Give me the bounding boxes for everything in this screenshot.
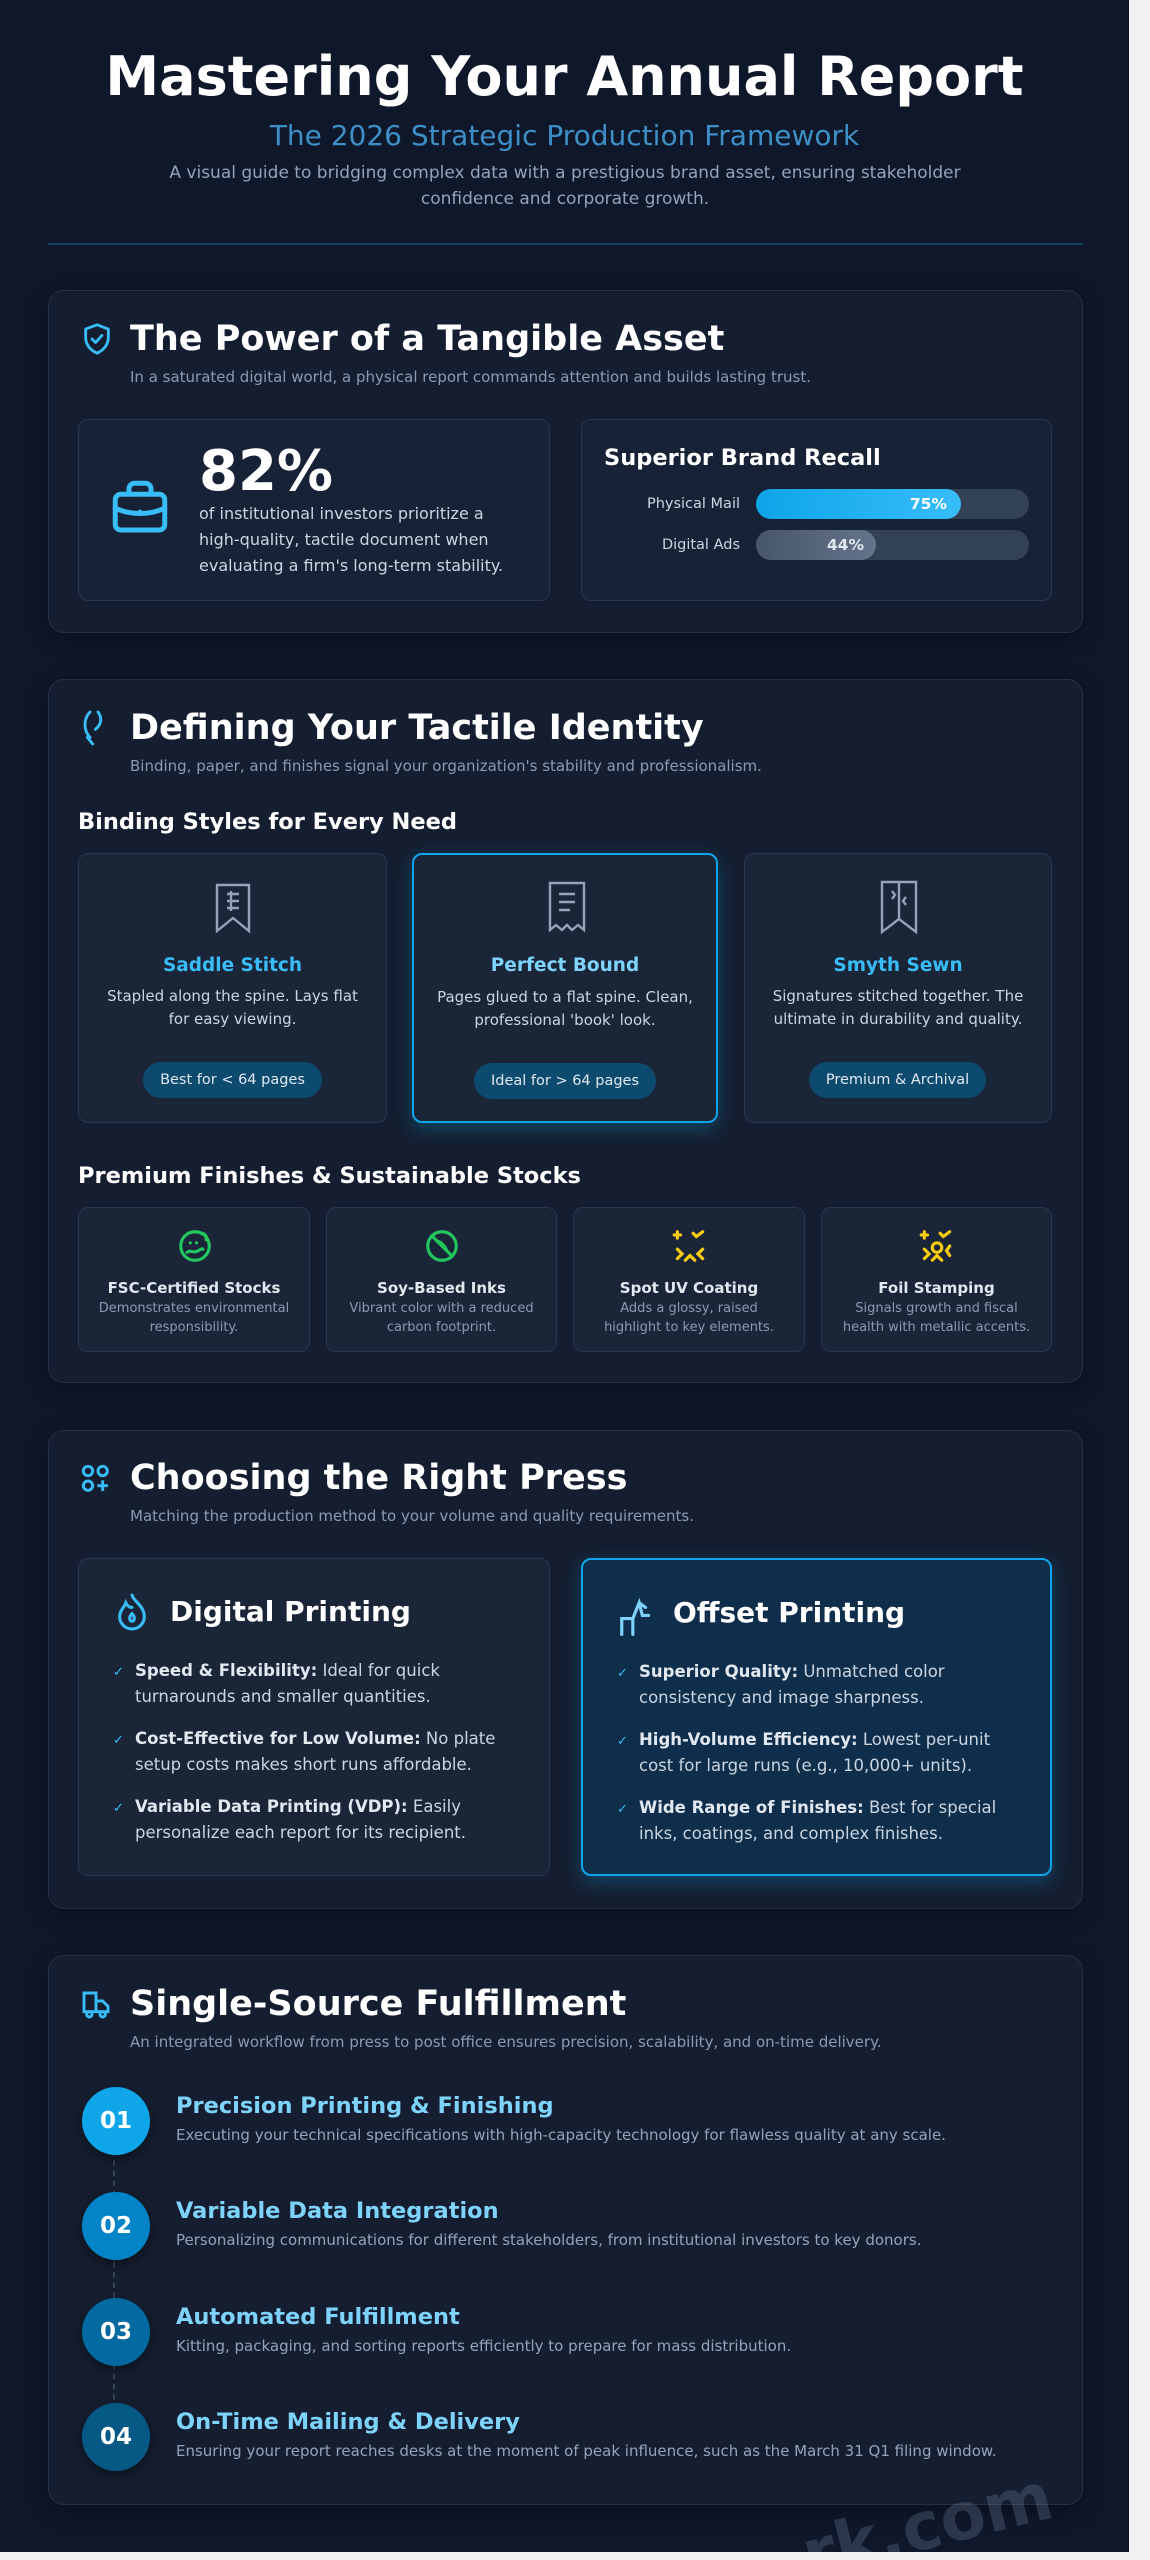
panel: fulfillment <box>48 1955 1083 2505</box>
title: Spot UV Coating <box>620 1279 758 1297</box>
title: Perfect Bound <box>491 955 639 976</box>
panel: tangible asset <box>48 290 1083 633</box>
step 02: Personalizing communications for different stakeholders, from institutional investors to key donors. <box>176 2231 921 2249</box>
intro text: A visual guide to bridging complex data with a prestigious brand asset, ensuring stakeholder confidence and corporate growth. <box>169 163 961 209</box>
card: spot UV <box>573 1207 805 1352</box>
icon: sparkles <box>672 1230 704 1262</box>
bar: physical mail <box>647 489 1029 519</box>
step 03 <box>80 2298 791 2374</box>
pill: saddle stitch <box>143 1062 322 1098</box>
card: offset printing: ✓ <box>617 1734 628 1749</box>
description: Signals growth and fiscal health with metallic accents. <box>843 1301 1030 1335</box>
icon: document <box>548 882 586 932</box>
description: Demonstrates environmental responsibility. <box>99 1301 289 1335</box>
list item: Wide Range of Finishes: Best for special inks, coatings, and complex finishes. <box>639 1798 996 1843</box>
stat card 82% <box>78 419 550 601</box>
heading: tangible asset: The Power of a Tangible Asset <box>130 319 724 359</box>
pill: smyth sewn: Premium & Archival <box>826 1072 969 1088</box>
icon: flame drop <box>118 1594 146 1630</box>
card: digital printing: ✓ <box>113 1801 124 1816</box>
pill: saddle stitch: Best for < 64 pages <box>160 1072 305 1088</box>
card title: Digital Printing <box>170 1595 411 1628</box>
subheading: tangible asset: In a saturated digital world, a physical report commands attention and builds lasting trust. <box>130 368 811 386</box>
step 02: Variable Data Integration <box>176 2198 499 2224</box>
card: digital printing <box>78 1558 550 1876</box>
subheading: fulfillment: An integrated workflow from press to post office ensures precision, scalability, and on-time delivery. <box>130 2033 882 2051</box>
heading: choosing press: Choosing the Right Press <box>130 1458 627 1498</box>
stat number: 82% <box>199 439 333 504</box>
stat text: of institutional investors prioritize a high-quality, tactile document when evaluating a firm's long-term stability. <box>199 504 503 575</box>
card: FSC <box>78 1207 310 1352</box>
bar: digital ads <box>662 530 1029 560</box>
list item: High-Volume Efficiency: Lowest per-unit cost for large runs (e.g., 10,000+ units). <box>639 1730 990 1775</box>
icon: sparkle circle <box>920 1230 952 1262</box>
step 04: On-Time Mailing & Delivery <box>176 2409 520 2435</box>
icon: bookmark list <box>216 884 250 934</box>
subheading: choosing press: Matching the production method to your volume and quality requirements. <box>130 1507 694 1525</box>
heading: premium finishes: Premium Finishes & Sustainable Stocks <box>78 1163 581 1189</box>
step 04: Ensuring your report reaches desks at the moment of peak influence, such as the March 31 Q1 filing window. <box>176 2442 997 2460</box>
heading: fulfillment: Single-Source Fulfillment <box>130 1984 626 2024</box>
card: digital printing: ✓ <box>113 1665 124 1680</box>
card title: Offset Printing <box>673 1596 905 1629</box>
panel: choosing press <box>48 1430 1083 1909</box>
title: Foil Stamping <box>878 1279 995 1297</box>
card: foil stamping <box>821 1207 1052 1352</box>
bar chart: brand recall <box>581 419 1052 601</box>
icon: leaf face <box>179 1230 211 1262</box>
card: offset printing <box>581 1558 1052 1876</box>
description: Signatures stitched together. The ultimate in durability and quality. <box>773 987 1023 1028</box>
card: saddle stitch <box>78 853 387 1123</box>
pill: smyth sewn <box>809 1062 986 1098</box>
title: Mastering Your Annual Report <box>105 45 1024 108</box>
icon: press <box>620 1598 650 1636</box>
title: Smyth Sewn <box>833 955 963 976</box>
card: offset printing: ✓ <box>617 1802 628 1817</box>
icon: book sewn <box>880 880 918 934</box>
bar: physical mail: 75% <box>910 495 947 513</box>
icon: shield check <box>84 323 110 355</box>
bar: digital ads: Digital Ads <box>662 537 740 553</box>
bar: physical mail: Physical Mail <box>647 496 740 512</box>
pill: perfect bound: Ideal for > 64 pages <box>491 1073 639 1089</box>
icon: grid plus <box>82 1464 109 1492</box>
card: smyth sewn <box>744 853 1052 1123</box>
step 02 <box>80 2192 921 2268</box>
bar: digital ads: 44% <box>827 536 864 554</box>
list item: Superior Quality: Unmatched color consistency and image sharpness. <box>639 1662 945 1707</box>
step 01: Precision Printing & Finishing <box>176 2093 554 2119</box>
list item: Variable Data Printing (VDP): Easily personalize each report for its recipient. <box>135 1797 466 1842</box>
step 03: 03 <box>100 2319 132 2345</box>
step 04 <box>80 2403 997 2476</box>
card: digital printing: ✓ <box>113 1733 124 1748</box>
icon: briefcase <box>112 480 168 532</box>
step 04: 04 <box>100 2424 132 2450</box>
description: Stapled along the spine. Lays flat for easy viewing. <box>107 987 358 1028</box>
title: Soy-Based Inks <box>377 1279 506 1297</box>
icon: truck <box>82 1992 110 2018</box>
pill: perfect bound <box>474 1063 656 1099</box>
description: Pages glued to a flat spine. Clean, professional 'book' look. <box>437 988 693 1029</box>
step 03: Kitting, packaging, and sorting reports efficiently to prepare for mass distribution. <box>176 2337 791 2355</box>
heading: tactile identity: Defining Your Tactile Identity <box>130 708 704 748</box>
heading: binding styles: Binding Styles for Every Need <box>78 809 457 835</box>
step 01: 01 <box>100 2108 132 2134</box>
icon: no-drop <box>426 1230 458 1262</box>
subheading: tactile identity: Binding, paper, and finishes signal your organization's stability and professionalism. <box>130 757 762 775</box>
description: Adds a glossy, raised highlight to key elements. <box>604 1301 774 1335</box>
step 02: 02 <box>100 2213 132 2239</box>
chart title: Superior Brand Recall <box>604 445 881 471</box>
step 03: Automated Fulfillment <box>176 2304 460 2330</box>
card: perfect bound <box>412 853 718 1123</box>
title: FSC-Certified Stocks <box>108 1279 280 1297</box>
subtitle: The 2026 Strategic Production Framework <box>270 119 859 152</box>
panel: tactile identity <box>48 679 1083 1383</box>
list item: Speed & Flexibility: Ideal for quick turnarounds and smaller quantities. <box>135 1661 440 1706</box>
step 01 <box>80 2087 946 2163</box>
icon: feather <box>84 710 102 746</box>
list item: Cost-Effective for Low Volume: No plate setup costs makes short runs affordable. <box>135 1729 495 1774</box>
description: Vibrant color with a reduced carbon footprint. <box>349 1301 534 1335</box>
card: offset printing: ✓ <box>617 1666 628 1681</box>
title: Saddle Stitch <box>163 955 302 976</box>
step 01: Executing your technical specifications with high-capacity technology for flawless quality at any scale. <box>176 2126 946 2144</box>
card: soy inks <box>326 1207 557 1352</box>
